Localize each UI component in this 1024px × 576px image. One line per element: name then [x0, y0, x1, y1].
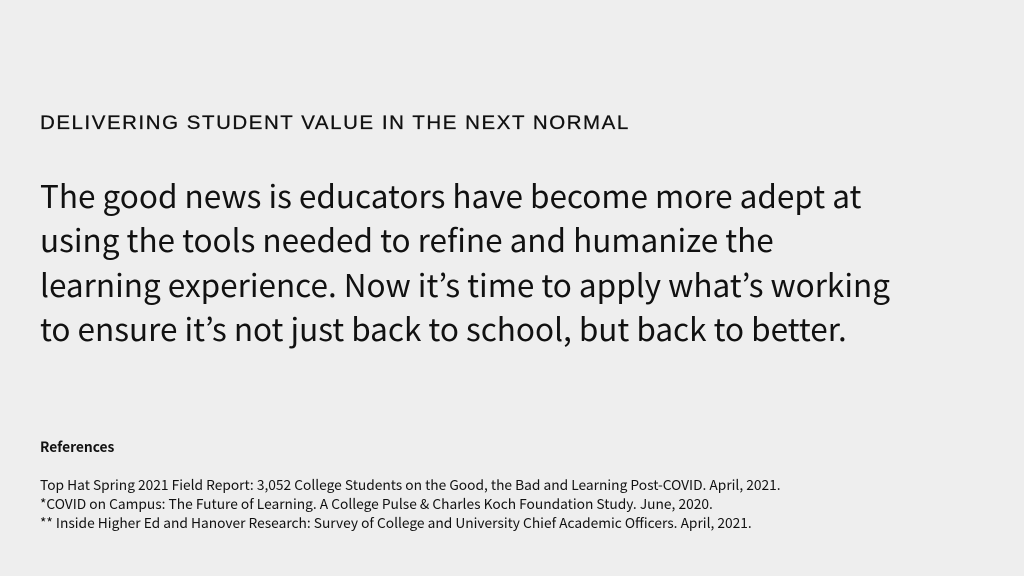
references heading: References — [40, 436, 114, 456]
main statement text block: using the tools needed to refine and humanize the — [40, 216, 774, 262]
main statement text block: The good news is educators have become more adept at — [40, 172, 861, 218]
main statement text block: learning experience. Now it’s time to apply what’s working — [40, 261, 890, 307]
main statement text block — [40, 172, 890, 351]
references list: Top Hat Spring 2021 Field Report: 3,052 College Students on the Good, the Bad and Learning Post-COVID. April, 2021. — [40, 474, 781, 494]
main statement text block: to ensure it’s not just back to school, but back to better. — [40, 305, 847, 351]
references list: *COVID on Campus: The Future of Learning. A College Pulse & Charles Koch Foundation Study. June, 2020. — [40, 493, 713, 513]
heading: DELIVERING STUDENT VALUE IN THE NEXT NORMAL — [40, 112, 630, 134]
references list — [40, 474, 781, 532]
references list: ** Inside Higher Ed and Hanover Research: Survey of College and University Chief Academic Officers. April, 2021. — [40, 512, 752, 532]
